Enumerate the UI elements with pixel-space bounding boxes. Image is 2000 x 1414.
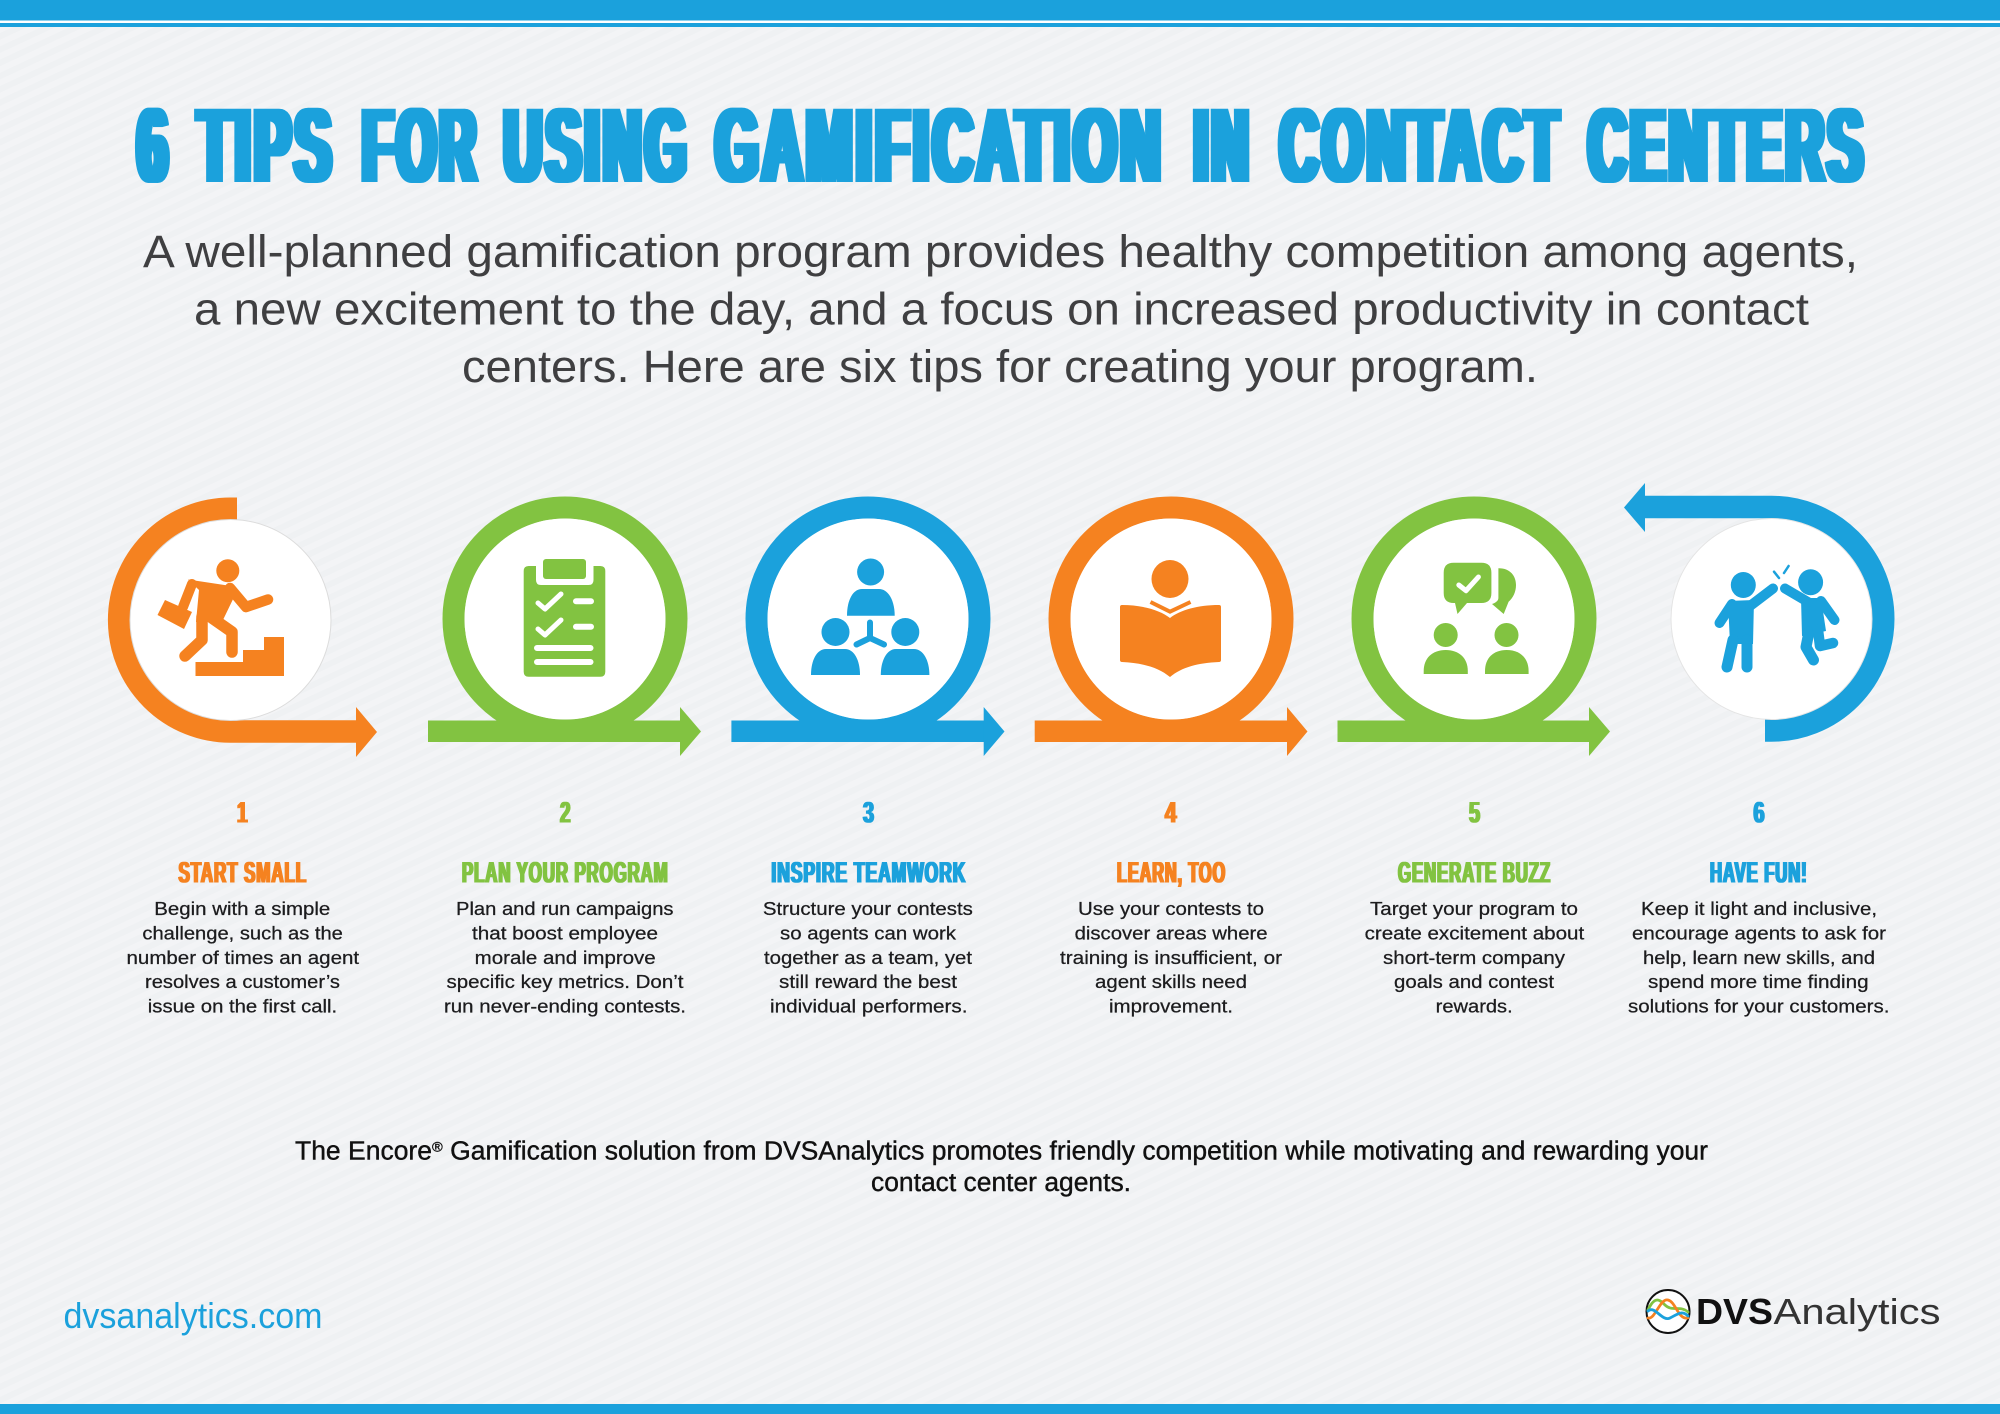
heading: generate buzz: GENERATE BUZZ [1398,857,1551,890]
loop arrow 5 [1338,508,1610,756]
heading: have fun: HAVE FUN! [1710,857,1808,890]
body text 1: number of times an agent [126,948,359,968]
heading: inspire teamwork: INSPIRE TEAMWORK [771,857,966,890]
body text 1 [126,899,359,1017]
body text 1: challenge, such as the [142,923,343,943]
body text 3: together as a team, yet [764,948,972,968]
body text 4: Use your contests to [1078,899,1264,919]
body text 5: create excitement about [1365,923,1584,943]
panel: step 1 start small [119,509,377,1017]
number 5: 5 [1469,796,1480,830]
loop arrow 6 [1624,483,1883,730]
heading: start small: START SMALL [178,857,307,890]
body text 2 [444,899,686,1017]
body text 4: discover areas where [1075,923,1268,943]
logo: DVSAnalytics: Analytics [1774,1291,1940,1332]
body text 1: resolves a customer’s [145,972,340,992]
body text 3: so agents can work [780,923,957,943]
panel: step 5 generate buzz [1338,508,1610,1017]
title [138,88,1866,204]
body text 5 [1365,899,1584,1017]
website url: dvsanalytics.com [64,1295,322,1336]
heading: plan your program: PLAN YOUR PROGRAM [462,857,669,890]
body text 6: Keep it light and inclusive, [1641,899,1877,919]
body text 2: specific key metrics. Don’t [446,972,684,992]
title: CONTACT [1280,88,1562,204]
body text 6 [1628,899,1889,1017]
panel: step 2 plan your program [428,508,701,1017]
body text 4: improvement. [1109,997,1233,1017]
title: TIPS [198,88,335,204]
number 4: 4 [1165,796,1177,830]
panel: step 4 learn too [1035,508,1308,1017]
body text 3: individual performers. [770,997,968,1017]
closing statement [295,1137,1709,1197]
body text 3 [763,899,973,1017]
body text 5: short-term company [1383,948,1565,968]
icon: person climbing stairs with briefcase [158,559,284,676]
body text 3: still reward the best [779,972,957,992]
closing statement: ® [432,1138,443,1154]
title: IN [1194,88,1252,204]
title: USING [504,88,690,204]
title: GAMIFICATION [716,88,1164,204]
title: 6 [138,88,172,204]
body text 2: morale and improve [475,948,656,968]
body text 2: that boost employee [472,923,658,943]
number 6: 6 [1754,796,1764,830]
intro text [143,226,1858,392]
logo: DVSAnalytics: DVS [1696,1291,1773,1332]
body text 6: spend more time finding [1648,972,1869,992]
body text 2: Plan and run campaigns [456,899,674,919]
body text 1: Begin with a simple [154,899,330,919]
intro text: a new excitement to the day, and a focus on increased productivity in contact [194,284,1810,334]
body text 1: issue on the first call. [148,997,337,1017]
panel: step 6 have fun [1624,483,1889,1017]
loop arrow 1 [119,509,377,757]
number 2: 2 [560,796,570,830]
body text 4: training is insufficient, or [1060,948,1282,968]
icon: clipboard checklist [524,559,605,677]
icon: person reading book [1120,560,1221,677]
number 3: 3 [863,796,874,830]
number 1: 1 [237,796,248,830]
body text 5: rewards. [1436,997,1513,1017]
intro text: centers. Here are six tips for creating your program. [462,341,1538,392]
body text 5: goals and contest [1394,972,1554,992]
body text 6: solutions for your customers. [1628,997,1889,1017]
icon: team of three people [811,558,929,675]
title: FOR [362,88,480,204]
body text 6: encourage agents to ask for [1632,923,1886,943]
loop arrow 2 [428,508,701,756]
closing statement: contact center agents. [871,1169,1131,1197]
logo: DVSAnalytics [1646,1290,1940,1333]
body text 2: run never-ending contests. [444,997,686,1017]
body text 4 [1060,899,1282,1017]
loop arrow 4 [1035,508,1308,756]
closing statement: Gamification solution from DVSAnalytics promotes friendly competition while motivating and rewarding your [443,1137,1709,1165]
panel: step 3 inspire teamwork [731,508,1004,1017]
icon: two people with speech bubbles [1424,563,1529,674]
intro text: A well-planned gamification program provides healthy competition among agents, [143,226,1858,277]
heading: learn, too: LEARN, TOO [1117,857,1226,890]
icon: two people high five [1720,566,1834,667]
loop arrow 3 [731,508,1004,756]
closing statement: The Encore [295,1137,427,1165]
body text 5: Target your program to [1370,899,1578,919]
body text 6: help, learn new skills, and [1643,948,1875,968]
body text 4: agent skills need [1095,972,1247,992]
body text 3: Structure your contests [763,899,973,919]
